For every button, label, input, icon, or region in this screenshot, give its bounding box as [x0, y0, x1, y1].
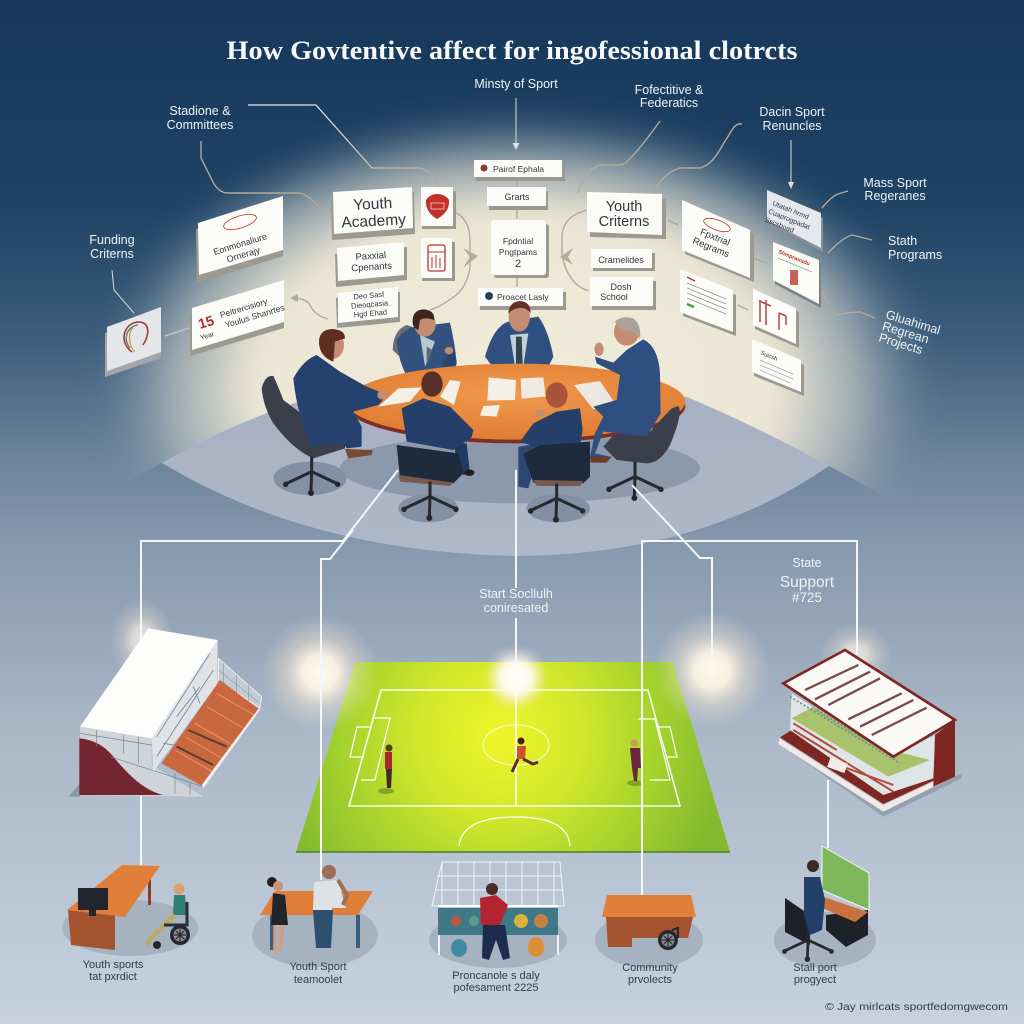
label: provincial professional: Proncanole s daly	[452, 970, 540, 982]
label: state sport project: progyect	[794, 974, 836, 986]
scene: office worker with monitor	[774, 846, 876, 968]
card: funding icon	[105, 307, 161, 377]
scene: youth sports desk with wheelchair	[62, 865, 198, 956]
label: youth sport team: teamoolet	[294, 974, 342, 986]
card: Chamelides	[591, 249, 655, 271]
connector lines: meeting to pitch	[141, 470, 857, 895]
card: Dosh School: Dosh	[610, 282, 632, 292]
card: left skewed panel: Ornerajy	[225, 245, 262, 264]
label: state support: #725	[792, 590, 822, 605]
papers	[487, 377, 516, 401]
card: left skewed panel: Eonmonaliure	[212, 231, 268, 257]
stadium left	[68, 628, 262, 797]
label: provincial professional: pofesament 2225	[453, 982, 539, 994]
label: federatives and federations: Federatics	[640, 96, 698, 110]
stadium right	[778, 650, 962, 817]
label: mass sport: Regeranes	[864, 189, 926, 203]
card: 15 programs: 15	[196, 312, 216, 332]
person: back-left official	[397, 309, 457, 382]
card: Chamelides: Cramelides	[598, 255, 644, 265]
floor shadow	[340, 433, 700, 503]
card: left skewed panel	[196, 196, 283, 283]
card: Partial Cpenants	[335, 242, 407, 287]
label: funding criteria: Funding	[89, 233, 135, 247]
chair: back left	[393, 325, 417, 363]
card: deep small: Deo Sasf	[353, 290, 385, 301]
card: Grants	[487, 187, 548, 210]
label: regional projects: Regrean	[881, 319, 931, 346]
label: funding criteria: Criterns	[90, 247, 134, 261]
card: top center: Pairof Ephala	[493, 164, 544, 174]
card: 15 programs: Peitrercisiory	[219, 296, 269, 320]
label: state sport project: Stall port	[793, 962, 837, 974]
label: sport social: Start Socllulh	[479, 587, 553, 601]
label: Stadiums and committees: Committees	[167, 118, 233, 132]
card: deep small: Dieoqcasia	[351, 298, 389, 311]
card: small bottom	[752, 339, 804, 396]
card: pink chart: Slimprauudu	[777, 249, 811, 267]
player left	[378, 744, 394, 794]
card: red shield icon	[421, 187, 456, 229]
card: top center	[474, 160, 565, 181]
card: red chart	[753, 289, 799, 348]
card: Federal Programs 2	[491, 220, 549, 278]
card: 15 programs: Year	[200, 331, 216, 342]
card: Youth Criterns: Youth	[606, 199, 642, 215]
card: document list	[680, 269, 736, 336]
label: mass sport: Mass Sport	[863, 176, 927, 190]
label: Ministry of Sport: Minsty of Sport	[474, 77, 558, 91]
label: sport resources: Dacin Sport	[759, 105, 825, 119]
card: deep small	[336, 287, 400, 328]
label: youth sport team: Youth Sport	[289, 961, 347, 973]
card: Federal Regrams: Regrams	[691, 236, 731, 260]
card: grey top right: Sscsboad	[764, 217, 795, 235]
label: Stadiums and committees: Stadione &	[169, 104, 231, 118]
card: Dosh School: School	[600, 292, 628, 302]
label: community projects: Community	[622, 962, 678, 974]
card: Youth Academy: Academy	[341, 211, 407, 232]
card: pink chart	[773, 242, 821, 308]
card: Proceed	[478, 288, 566, 310]
card: Youth Criterns: Criterns	[599, 214, 649, 230]
label: community projects: prvolects	[628, 974, 673, 986]
label: state support: Support	[780, 574, 835, 591]
card: grey top right: Utatah hrmd	[771, 200, 810, 221]
card: Federal Regrams: Fpxtrial	[698, 227, 731, 249]
card: small bottom: Suicsh	[759, 350, 778, 363]
scene: youth sport team discussion	[252, 865, 378, 967]
meeting table group	[262, 301, 700, 523]
wall glow	[108, 109, 922, 490]
card: grey top right: Cuaprogpadat	[767, 208, 811, 231]
card: grey top right	[764, 190, 823, 252]
card: Grants: Grarts	[504, 192, 530, 202]
card: Youth Criterns	[587, 192, 666, 239]
person: front-right official with chair	[518, 382, 590, 523]
label: state programs: Programs	[888, 248, 942, 262]
label: youth sports: tat pxrdict	[89, 971, 137, 983]
card: Federal Regrams	[682, 200, 754, 282]
player right	[627, 740, 643, 786]
person: right official with chair	[590, 317, 680, 501]
label: regional projects: Projects	[877, 330, 924, 357]
card: Federal Programs 2: Fpdntial	[503, 236, 533, 246]
label: youth sports: Youth sports	[83, 959, 143, 971]
card: Dosh School	[590, 277, 656, 310]
card: Youth Academy	[331, 187, 415, 240]
person: left official with chair	[262, 329, 388, 496]
pitch	[296, 662, 730, 852]
field glows	[110, 598, 892, 731]
scene: community desk	[595, 895, 703, 968]
card: 15 programs: Youlus Shanrtes	[224, 302, 286, 330]
card: Partial Cpenants: Cpenants	[351, 261, 393, 274]
card: Federal Programs 2: Pngtpams	[499, 247, 537, 257]
card: Federal Programs 2: 2	[515, 258, 521, 270]
card: Proceed: Proacet Lasly	[497, 292, 549, 302]
label: sport social: coniresated	[484, 601, 548, 615]
card: deep small: Hgd Ehad	[353, 308, 387, 319]
person: back-centre official	[485, 301, 553, 375]
copyright: © Jay mirlcats sportfedomgwecom	[825, 1001, 1008, 1013]
card: calculator icon	[421, 238, 455, 281]
label: federatives and federations: Fofectitive &	[635, 83, 703, 97]
label: regional projects: Gluahimal	[884, 307, 942, 337]
table	[347, 364, 685, 443]
card: 15 programs	[190, 280, 286, 356]
person: front-left official with chair	[397, 371, 474, 521]
meeting floor	[162, 385, 829, 556]
title: How Govtentive affect for ingofessional clotrcts	[226, 36, 798, 65]
card: Youth Academy: Youth	[353, 195, 393, 214]
card: Partial Cpenants: Paxxial	[355, 250, 386, 263]
scene: goal display with man	[429, 862, 567, 968]
player centre runner	[512, 738, 538, 772]
label: state programs: Stath	[888, 234, 917, 248]
centre bright glow	[482, 644, 550, 712]
label: state support: State	[792, 556, 822, 570]
label: sport resources: Renuncles	[762, 119, 822, 133]
upper connectors and arrows	[112, 98, 875, 336]
